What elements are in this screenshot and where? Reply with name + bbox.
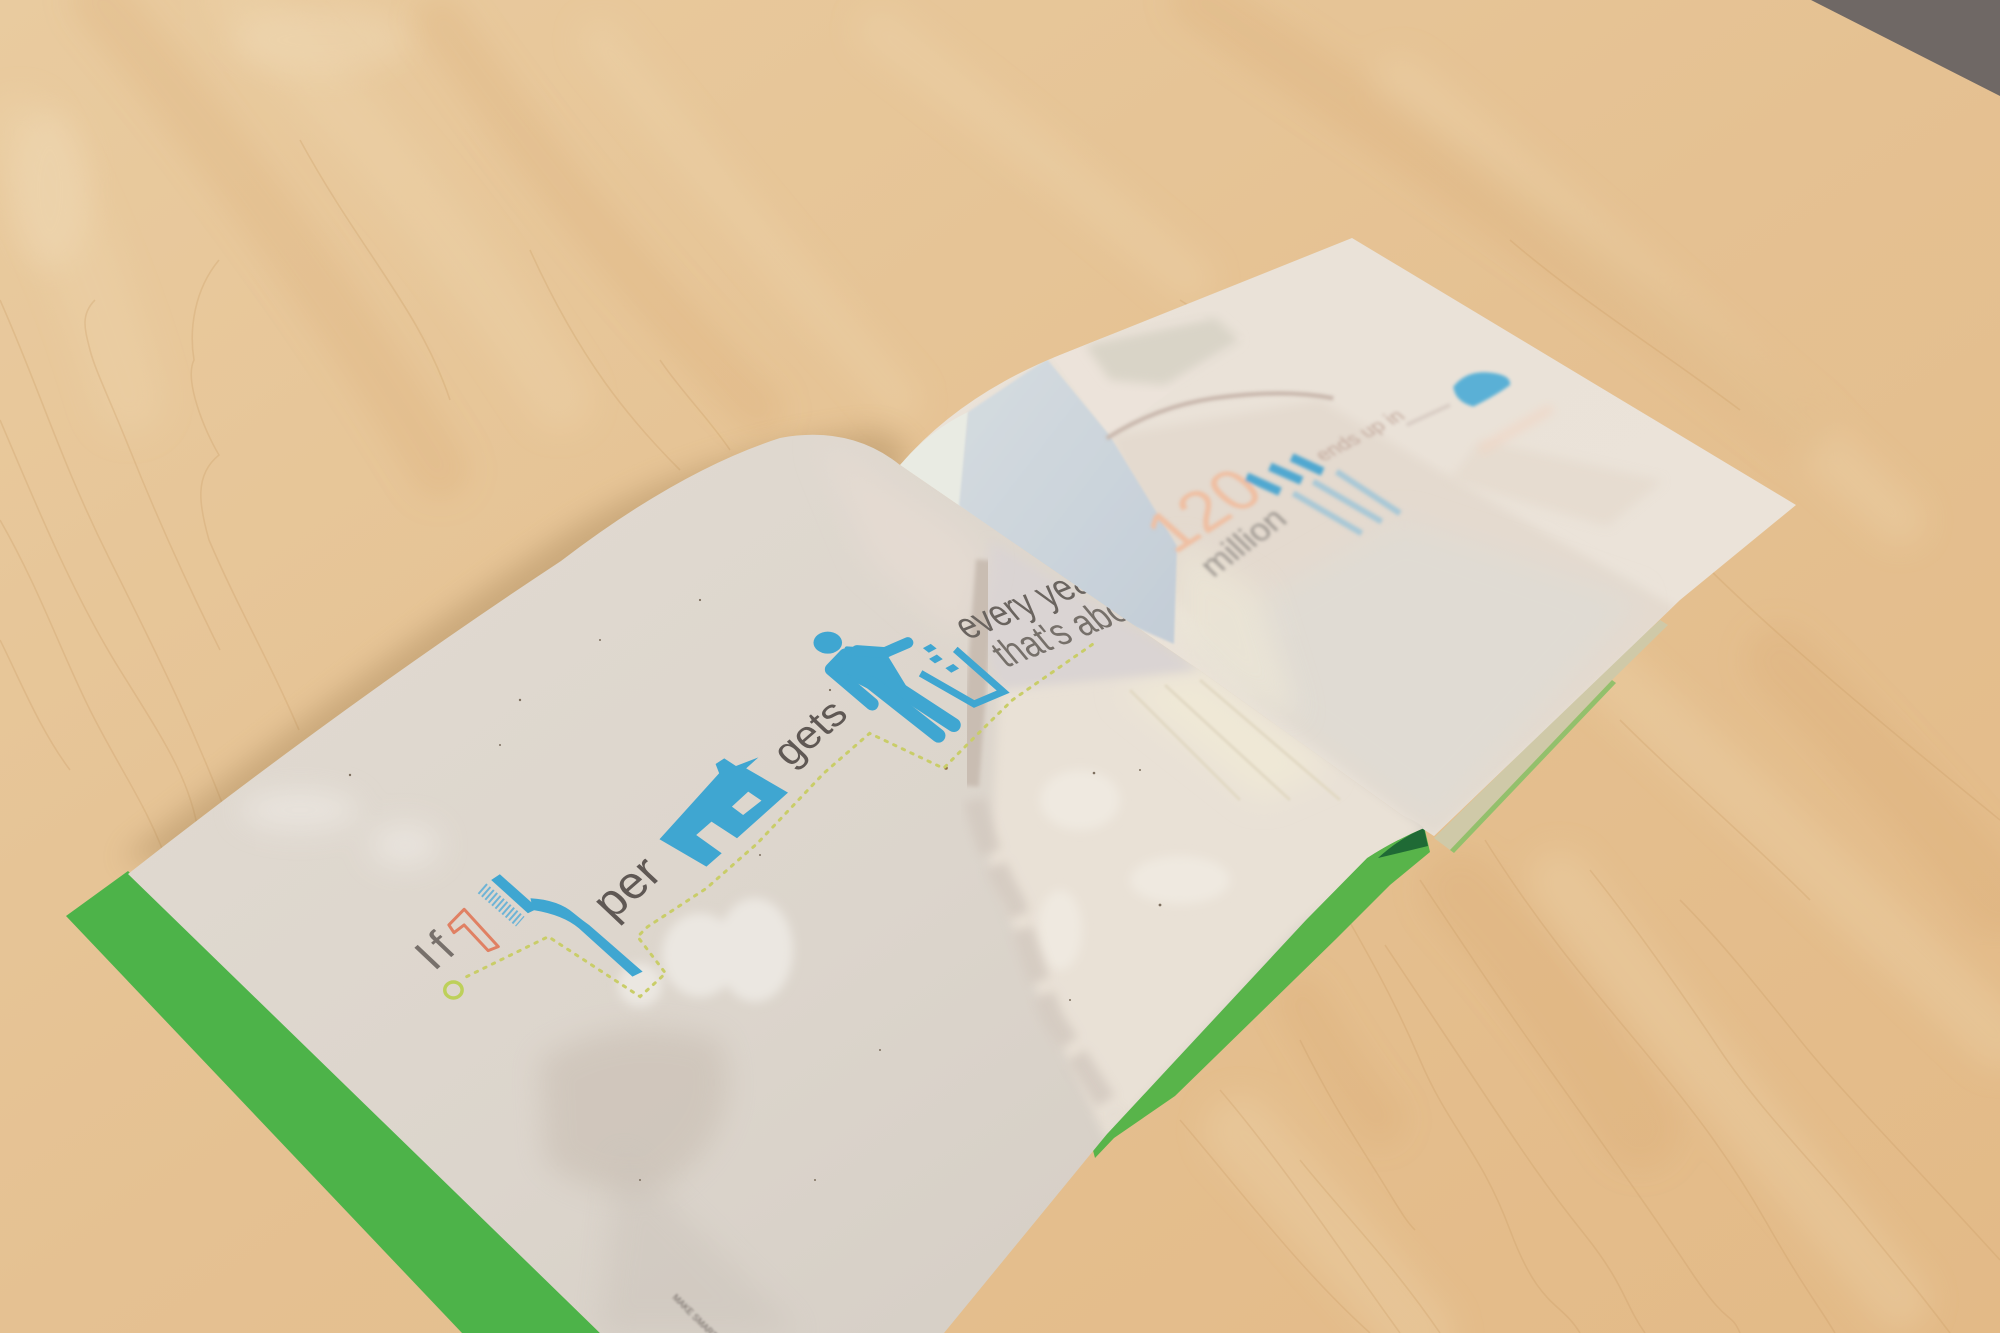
lower dim area bbox=[630, 1215, 656, 1299]
lighter knots of grain bbox=[10, 5, 410, 270]
lilac fold area above rice bbox=[1004, 660, 1186, 688]
connector to icon bbox=[1407, 405, 1450, 425]
light box beside fold bbox=[1053, 338, 1104, 358]
white-pink hump bbox=[820, 440, 985, 640]
page block edge, right side bbox=[1434, 620, 1668, 850]
text: every year: every year bbox=[943, 556, 1111, 647]
paper specks bbox=[349, 599, 1161, 1181]
right page of booklet bbox=[900, 238, 1796, 836]
numeral 1 outline bbox=[449, 909, 498, 951]
infographic icons on left page bbox=[445, 632, 1094, 998]
word per: per bbox=[582, 847, 672, 929]
word gets: gets bbox=[763, 690, 856, 774]
icon: trash bin with litter bbox=[921, 644, 1003, 704]
blurred right page graphics bbox=[1107, 372, 1510, 584]
word If: If bbox=[404, 919, 470, 979]
faint page rays near spine bbox=[1130, 680, 1340, 800]
textured lower area of right page bbox=[1424, 830, 1425, 831]
plate rim beads, lower bbox=[975, 800, 1114, 1115]
rice area near spine bbox=[990, 665, 1424, 1140]
green cover, lower right edge bbox=[1085, 826, 1430, 1158]
start circle bbox=[445, 982, 462, 998]
cast shadow of booklet bbox=[120, 430, 910, 900]
number 120: 120 bbox=[1130, 456, 1279, 565]
plate rim band bbox=[969, 560, 986, 786]
icon: toothbrush bbox=[482, 874, 643, 977]
cream band along spine bbox=[1191, 574, 1273, 689]
text: that's about: that's about bbox=[981, 578, 1163, 675]
plate rim curve bbox=[1107, 393, 1333, 438]
plate area on right page bbox=[1110, 400, 1680, 836]
blurred bristles, far left bbox=[258, 794, 430, 863]
cream band at fold bbox=[900, 412, 968, 510]
blurred body copy bbox=[1450, 408, 1662, 526]
blurred gray smear on the box bbox=[1085, 318, 1240, 385]
green cover, left edge bbox=[66, 871, 600, 1333]
dotted connector path bbox=[467, 643, 1094, 997]
left page of booklet bbox=[128, 435, 1424, 1333]
dark corner beyond table bbox=[1811, 0, 2000, 96]
blue tally bars, thin bbox=[1293, 472, 1400, 533]
warm glow on pages near spine bbox=[1120, 670, 1330, 800]
word million: million bbox=[1192, 501, 1295, 584]
blue-gray fold shadow bbox=[959, 359, 1177, 644]
rice mottling bbox=[1043, 775, 1224, 964]
blurred toothbrush bristles, center bbox=[618, 898, 793, 1007]
brown blurred shadow bbox=[540, 1029, 728, 1192]
blue tally bars, bold bbox=[1247, 457, 1323, 492]
dark green inner cover bbox=[1378, 828, 1428, 858]
icon: house bbox=[659, 757, 788, 867]
blue landfill icon bbox=[1453, 372, 1510, 407]
icon: person littering bbox=[814, 632, 954, 736]
small caption text: ends up in bbox=[1310, 406, 1410, 465]
